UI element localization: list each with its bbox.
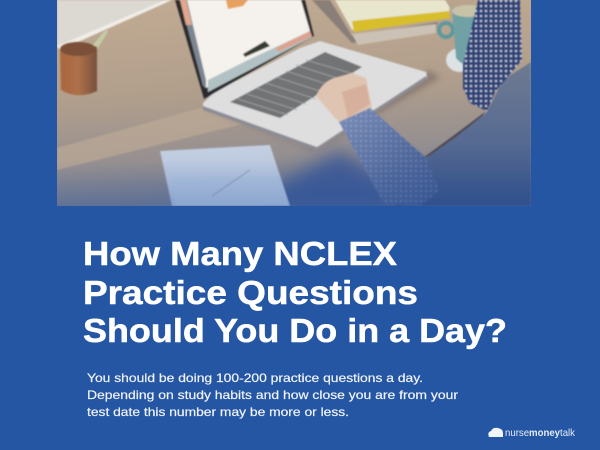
teal mug bbox=[439, 5, 484, 72]
wordmark: nursemoneytalk bbox=[505, 427, 576, 439]
description text: test date this number may be more or less. bbox=[87, 406, 349, 419]
copper pen cup bbox=[60, 29, 108, 95]
icon: cloud bbox=[488, 428, 503, 437]
title: Should You Do in a Day? bbox=[83, 313, 507, 350]
desk surface bbox=[57, 0, 531, 206]
title: Practice Questions bbox=[83, 275, 418, 312]
torso bbox=[395, 62, 531, 206]
screen bbox=[180, 0, 310, 88]
screen bezel bbox=[175, 0, 314, 99]
plaid upper arm bbox=[463, 0, 522, 111]
description text: Depending on study habits and how close you are from your bbox=[87, 389, 458, 402]
title bbox=[83, 236, 507, 350]
desk shadow under arm bbox=[423, 112, 485, 158]
bottom blue shadow bbox=[269, 143, 396, 206]
laptop base bbox=[203, 41, 427, 148]
screen orange block bbox=[226, 0, 248, 9]
logo: nursemoneytalk bbox=[488, 427, 576, 439]
screen dock icons bbox=[208, 31, 312, 92]
title: How Many NCLEX bbox=[83, 236, 398, 273]
keyboard bbox=[230, 52, 362, 118]
screen dark motif bbox=[243, 41, 270, 57]
wall and window sill bbox=[57, 0, 240, 170]
description text bbox=[87, 372, 458, 419]
laptop base shadow bbox=[306, 69, 440, 150]
description text: You should be doing 100-200 practice questions a day. bbox=[87, 372, 423, 385]
shirt sleeve bbox=[339, 108, 440, 206]
photo: laptop on desk bbox=[57, 0, 531, 215]
books bbox=[312, 0, 451, 46]
laptop bbox=[175, 0, 440, 150]
notebook paper bbox=[160, 145, 290, 206]
photo fade bbox=[57, 172, 531, 206]
hand bbox=[316, 73, 372, 127]
